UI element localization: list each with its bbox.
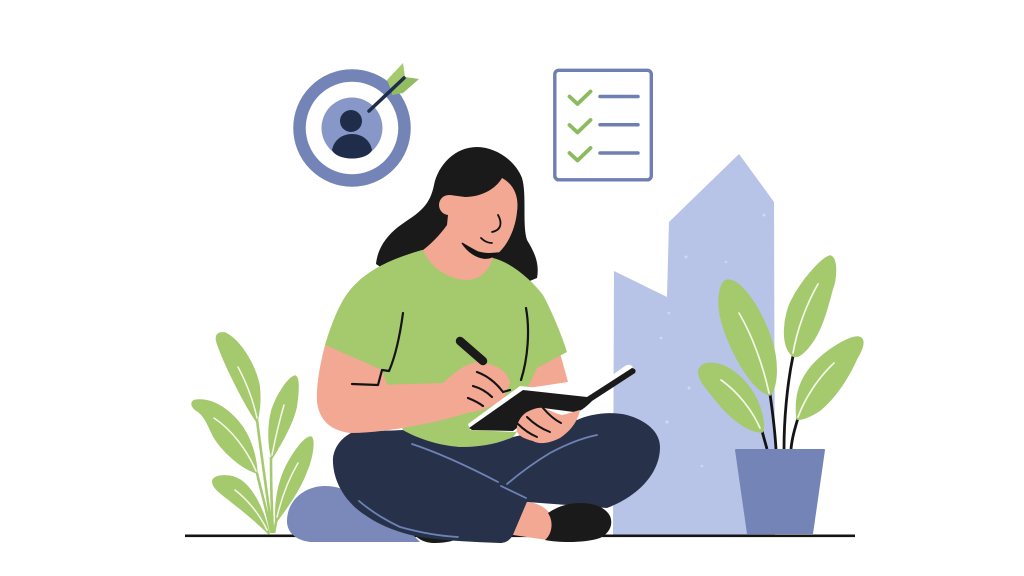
notebook [468, 365, 636, 432]
ear [439, 195, 459, 215]
writing hand fingers [468, 372, 510, 406]
near arm upper under sleeve [325, 340, 390, 390]
plant: potted plant [699, 256, 863, 534]
background building shape [613, 154, 775, 535]
plant: left leafy plant [192, 333, 313, 534]
sleeve fold lines [352, 308, 528, 385]
neck and face [423, 178, 517, 280]
lower shoe [410, 530, 462, 543]
woman figure [317, 147, 660, 543]
foot [513, 502, 553, 540]
t-shirt [325, 250, 567, 447]
ground line [185, 534, 855, 537]
icon: checklist [555, 70, 651, 180]
hand holding notebook [517, 408, 580, 443]
pen [460, 341, 483, 361]
hair [376, 147, 538, 285]
plant pot [735, 449, 825, 534]
floor cushion [287, 486, 420, 542]
near arm [317, 345, 510, 433]
icon: target with person and arrow [300, 63, 419, 180]
far arm [515, 353, 568, 390]
legs [333, 413, 660, 543]
shoe [545, 503, 611, 542]
trouser seams [359, 435, 597, 537]
facial lines [462, 215, 500, 258]
